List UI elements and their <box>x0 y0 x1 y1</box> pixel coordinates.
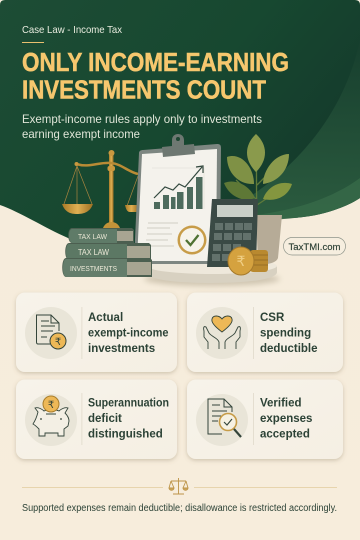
icon: piggy bank with rupee coin <box>25 394 77 446</box>
card text: deductible <box>260 343 318 355</box>
card: verified expenses accepted <box>187 380 343 459</box>
card text: expenses <box>260 413 312 425</box>
illustration: platform <box>144 258 280 286</box>
illustration: plant pot <box>256 215 282 264</box>
card text <box>260 398 312 440</box>
illustration: rupee coins: ₹ <box>237 253 246 269</box>
icon: document with rupee <box>25 307 77 359</box>
card text: Verified <box>260 398 302 410</box>
card text: accepted <box>260 428 310 440</box>
card text: exempt-income <box>88 328 168 340</box>
illustration: stack of law books <box>62 228 152 277</box>
card: superannuation deficit distinguished <box>16 380 177 459</box>
title: INVESTMENTS COUNT <box>22 74 266 104</box>
subtitle <box>22 112 262 141</box>
card text <box>88 312 168 355</box>
website badge: TaxTMI.com <box>288 242 341 253</box>
book: top: TAX LAW <box>78 232 108 241</box>
book: bottom: INVESTMENTS <box>70 264 117 273</box>
trend arrow <box>154 166 203 198</box>
green header background <box>0 0 360 262</box>
icon: footer scales <box>169 478 188 494</box>
title <box>22 47 289 104</box>
illustration: plant <box>224 134 292 215</box>
eyebrow rule <box>22 42 44 43</box>
website badge <box>284 238 346 255</box>
footer statement: Supported expenses remain deductible; disallowance is restricted accordingly. <box>22 503 337 514</box>
card text <box>88 398 169 440</box>
icon: hands holding heart <box>196 307 248 359</box>
icon: document with magnifier <box>196 394 248 446</box>
card: actual exempt-income investments <box>16 292 177 372</box>
chart frame <box>152 168 204 209</box>
card text: investments <box>88 343 155 355</box>
paper lines <box>146 223 178 246</box>
card text <box>260 312 318 355</box>
title: ONLY INCOME-EARNING <box>22 47 289 77</box>
illustration: clipboard with rising chart <box>134 134 221 264</box>
clipboard clip <box>162 134 195 157</box>
card text: Superannuation <box>88 398 169 410</box>
eyebrow: case law label: Case Law - Income Tax <box>22 25 122 36</box>
card: csr spending deductible <box>187 292 343 372</box>
book: middle: TAX LAW <box>78 248 109 257</box>
card text: distinguished <box>88 428 163 440</box>
card text: Actual <box>88 312 123 324</box>
card text: deficit <box>88 413 122 425</box>
subtitle: Exempt-income rules apply only to investments <box>22 112 262 126</box>
illustration: calculator <box>207 199 258 267</box>
illustration: scales of justice <box>62 150 138 228</box>
icon: piggy bank with rupee coin: ₹ <box>48 400 54 411</box>
illustration: rupee coins <box>228 247 268 275</box>
card text: CSR <box>260 312 285 324</box>
bar chart <box>154 177 202 209</box>
icon: document with rupee: ₹ <box>55 337 61 348</box>
subtitle: earning exempt income <box>22 127 140 141</box>
card text: spending <box>260 328 311 340</box>
check badge <box>178 226 206 254</box>
footer divider rules <box>22 486 337 488</box>
